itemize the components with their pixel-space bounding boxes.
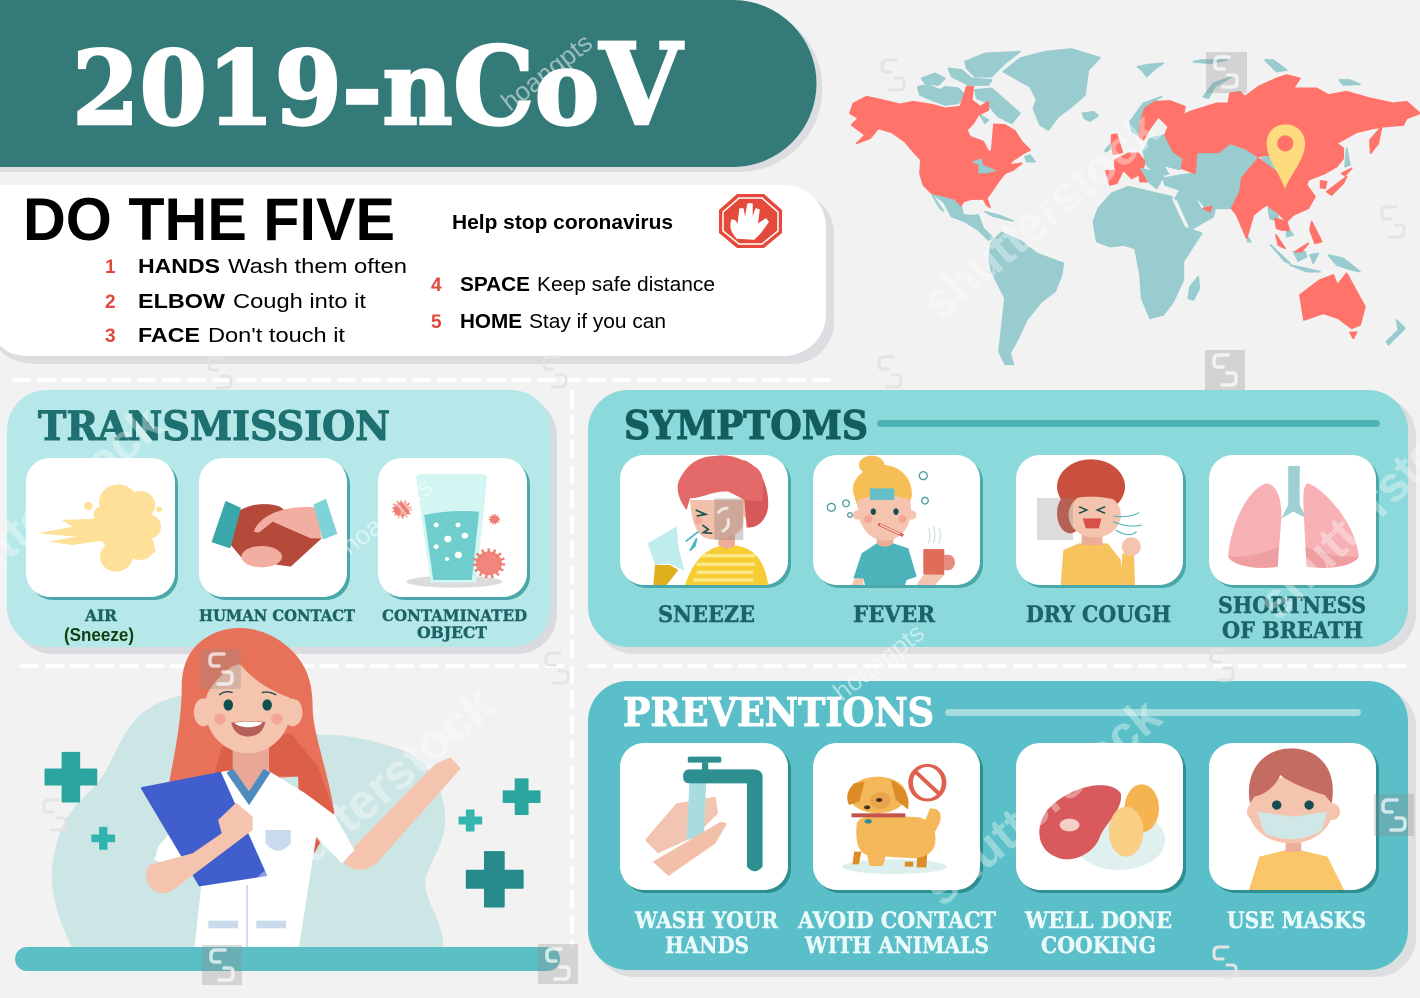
coat pockets <box>208 830 291 948</box>
icon: coughing woman <box>1057 459 1142 585</box>
icon: masked person <box>1247 748 1344 890</box>
heading: do the five: DO THE FIVE <box>23 186 395 253</box>
neck <box>233 747 269 795</box>
subheading: Help stop coronavirus <box>452 212 673 234</box>
list item 4: Keep safe distance <box>537 274 715 296</box>
icon: dog with no sign <box>842 765 947 874</box>
label: sneeze: SNEEZE <box>658 602 755 628</box>
label: avoid contact with animals: WITH ANIMALS <box>804 933 989 959</box>
watermarks: shutterstock <box>913 687 1171 916</box>
list item 1: 1 <box>105 257 116 278</box>
card: sneeze <box>620 455 791 588</box>
list item 5: Stay if you can <box>529 311 666 333</box>
world map <box>850 49 1420 364</box>
right arm <box>344 757 461 870</box>
label: sneeze note: (Sneeze) <box>64 625 134 645</box>
background blob <box>52 695 445 948</box>
watermarks: shutterstock <box>911 101 1169 330</box>
list item 5: 5 <box>431 312 442 333</box>
collar <box>230 771 267 798</box>
icon: woman with fever <box>827 456 955 585</box>
cross 5 <box>467 852 523 907</box>
label: avoid contact with animals <box>797 908 997 959</box>
face <box>205 663 291 753</box>
label: use masks: USE MASKS <box>1227 908 1366 934</box>
label: human contact: HUMAN CONTACT <box>199 606 355 625</box>
card: wash hands <box>620 743 791 893</box>
bottom bar <box>15 947 560 971</box>
card: dry cough <box>1016 455 1186 588</box>
list item 1: Wash them often <box>228 256 407 278</box>
heading: symptoms: SYMPTOMS <box>624 403 868 449</box>
card: air <box>26 458 178 600</box>
card: shortness of breath <box>1209 455 1379 588</box>
list item 1 <box>105 256 407 278</box>
list item 2: Cough into it <box>233 291 367 313</box>
list item 5 <box>431 311 666 333</box>
label: air: AIR <box>84 606 118 625</box>
label: wash your hands <box>634 908 779 959</box>
label: contaminated object: CONTAMINATED <box>382 606 527 625</box>
heading: preventions: PREVENTIONS <box>623 690 934 736</box>
list item 3: 3 <box>105 326 116 347</box>
heading rule <box>945 709 1361 716</box>
list item 3 <box>105 325 346 347</box>
illustration: nurse <box>45 628 540 948</box>
cross 4 <box>459 810 482 831</box>
list item 5: HOME <box>460 311 522 333</box>
label: avoid contact with animals: AVOID CONTACT <box>797 908 997 934</box>
list item 2: 2 <box>105 292 116 313</box>
icon: meat and potatoes <box>1039 784 1165 870</box>
icon: handshake <box>213 500 336 567</box>
dashed dividers <box>14 380 1405 945</box>
icon: water glass with viruses <box>394 474 502 588</box>
list item 4: 4 <box>431 275 442 296</box>
label: wash your hands: WASH YOUR <box>634 908 779 934</box>
icon: stop hand sign <box>719 194 782 248</box>
hair back <box>169 628 334 863</box>
cross 1 <box>45 753 96 802</box>
card: use masks <box>1209 743 1379 893</box>
icon: lungs <box>1228 466 1359 568</box>
watermarks: shutterstock <box>239 676 505 911</box>
watermarks: hoangpts <box>827 617 930 707</box>
list item 1: HANDS <box>138 256 220 278</box>
icon: location pin <box>1267 124 1305 189</box>
panel: preventions <box>588 681 1416 977</box>
left arm <box>146 803 253 893</box>
label: wash your hands: HANDS <box>665 933 749 959</box>
card: avoid animals <box>813 743 983 893</box>
card: well done cooking <box>1016 743 1186 893</box>
card: human contact <box>199 458 350 600</box>
fringe <box>205 637 304 700</box>
panel: transmission <box>7 390 557 654</box>
clipboard <box>142 773 265 885</box>
label: well done cooking <box>1024 908 1172 959</box>
label: shortness of breath: OF BREATH <box>1222 618 1363 644</box>
heading rule <box>877 420 1380 427</box>
list item 4: SPACE <box>460 274 530 296</box>
label: fever: FEVER <box>853 602 936 628</box>
label: dry cough: DRY COUGH <box>1026 602 1171 628</box>
heading: transmission: TRANSMISSION <box>38 403 390 450</box>
ears <box>194 698 213 726</box>
panel: do the five <box>0 185 834 364</box>
label: shortness of breath <box>1218 593 1366 644</box>
list item 3: FACE <box>138 325 200 347</box>
list item 3: Don't touch it <box>208 325 346 347</box>
label: contaminated object: OBJECT <box>417 623 487 642</box>
list item 4 <box>431 274 715 296</box>
cross 2 <box>92 827 115 849</box>
icon: sneeze cloud <box>38 484 162 572</box>
card: contaminated object <box>378 458 530 600</box>
icon: hands under tap <box>645 757 763 876</box>
card: fever <box>813 455 983 588</box>
label: contaminated object <box>382 606 527 642</box>
title text: 2019-nCoV <box>72 20 684 151</box>
label: well done cooking: COOKING <box>1041 933 1156 959</box>
title banner <box>0 0 823 172</box>
icon: sneezing boy <box>648 455 768 585</box>
watermarks: hoangpts <box>495 27 598 117</box>
watermarks: hoangpts <box>335 471 438 561</box>
list item 2 <box>105 291 367 313</box>
eyes and mouth <box>214 692 283 737</box>
list item 2: ELBOW <box>138 291 225 313</box>
cross 3 <box>503 779 540 814</box>
label: well done cooking: WELL DONE <box>1024 908 1172 934</box>
panel: symptoms <box>588 390 1416 654</box>
lab coat <box>154 770 354 948</box>
label: shortness of breath: SHORTNESS <box>1218 593 1366 619</box>
